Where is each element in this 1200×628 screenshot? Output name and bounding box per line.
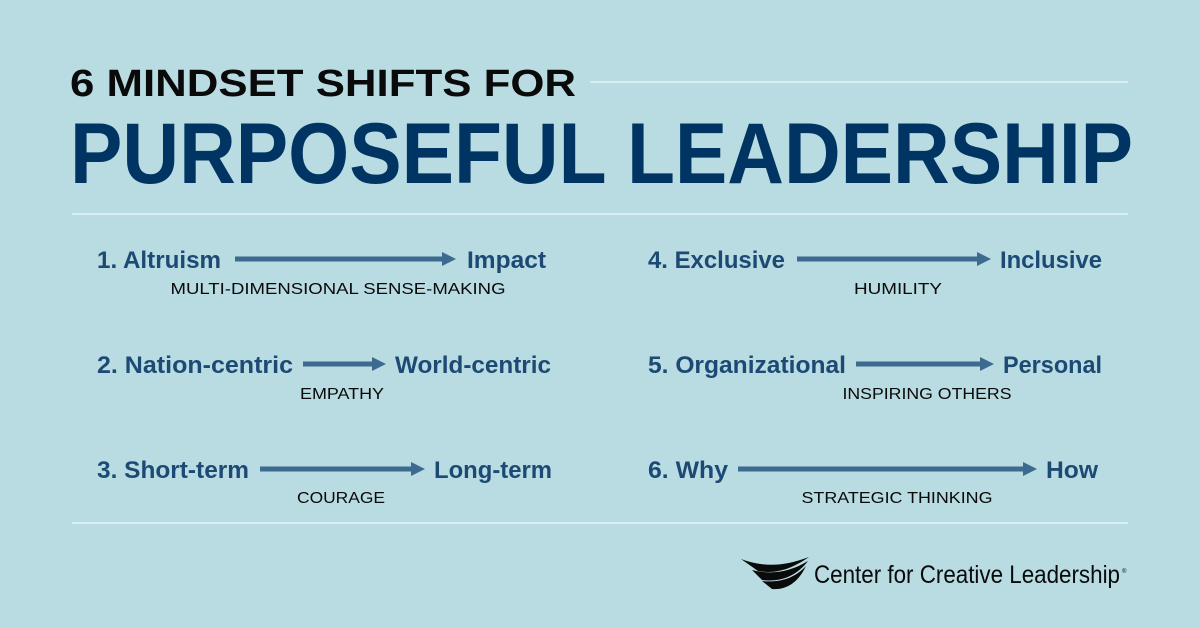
shift 1 <box>97 247 546 298</box>
arrow 5 <box>856 357 994 371</box>
arrow 6 <box>738 462 1037 476</box>
logo: ® <box>1122 568 1127 575</box>
shift 4: 4. Exclusive <box>648 247 785 274</box>
shift 3: 3. Short-term <box>97 457 249 484</box>
shift 3: COURAGE <box>297 490 385 507</box>
shift 4: HUMILITY <box>854 281 942 298</box>
shift 6: How <box>1046 457 1098 484</box>
shift 5: INSPIRING OTHERS <box>842 386 1012 403</box>
shift 2 <box>97 352 551 403</box>
shift 1: MULTI-DIMENSIONAL SENSE-MAKING <box>170 281 506 298</box>
title <box>70 63 1133 202</box>
icon: swoosh <box>741 557 809 589</box>
shift 1: Impact <box>467 247 546 274</box>
arrow 1 <box>235 252 456 266</box>
arrow 2 <box>303 357 386 371</box>
shift 2: 2. Nation-centric <box>97 352 293 379</box>
shift 2: EMPATHY <box>300 386 384 403</box>
shift 1: 1. Altruism <box>97 247 221 274</box>
title line 2: PURPOSEFUL LEADERSHIP <box>70 106 1133 202</box>
logo text: Center for Creative Leadership <box>814 561 1120 589</box>
arrow 3 <box>260 462 425 476</box>
shift 5: Personal <box>1003 352 1102 379</box>
shift 4: Inclusive <box>1000 247 1102 274</box>
shift 5: 5. Organizational <box>648 352 846 379</box>
shift 6: STRATEGIC THINKING <box>802 490 992 507</box>
shift 3 <box>97 457 552 507</box>
shift 5 <box>648 352 1102 403</box>
shift 6 <box>648 457 1098 507</box>
shift 2: World-centric <box>395 352 551 379</box>
logo <box>741 557 1127 589</box>
shift 6: 6. Why <box>648 457 729 484</box>
arrow 4 <box>797 252 991 266</box>
title line 1: 6 MINDSET SHIFTS FOR <box>70 63 576 105</box>
shift 4 <box>648 247 1102 298</box>
shift 3: Long-term <box>434 457 552 484</box>
